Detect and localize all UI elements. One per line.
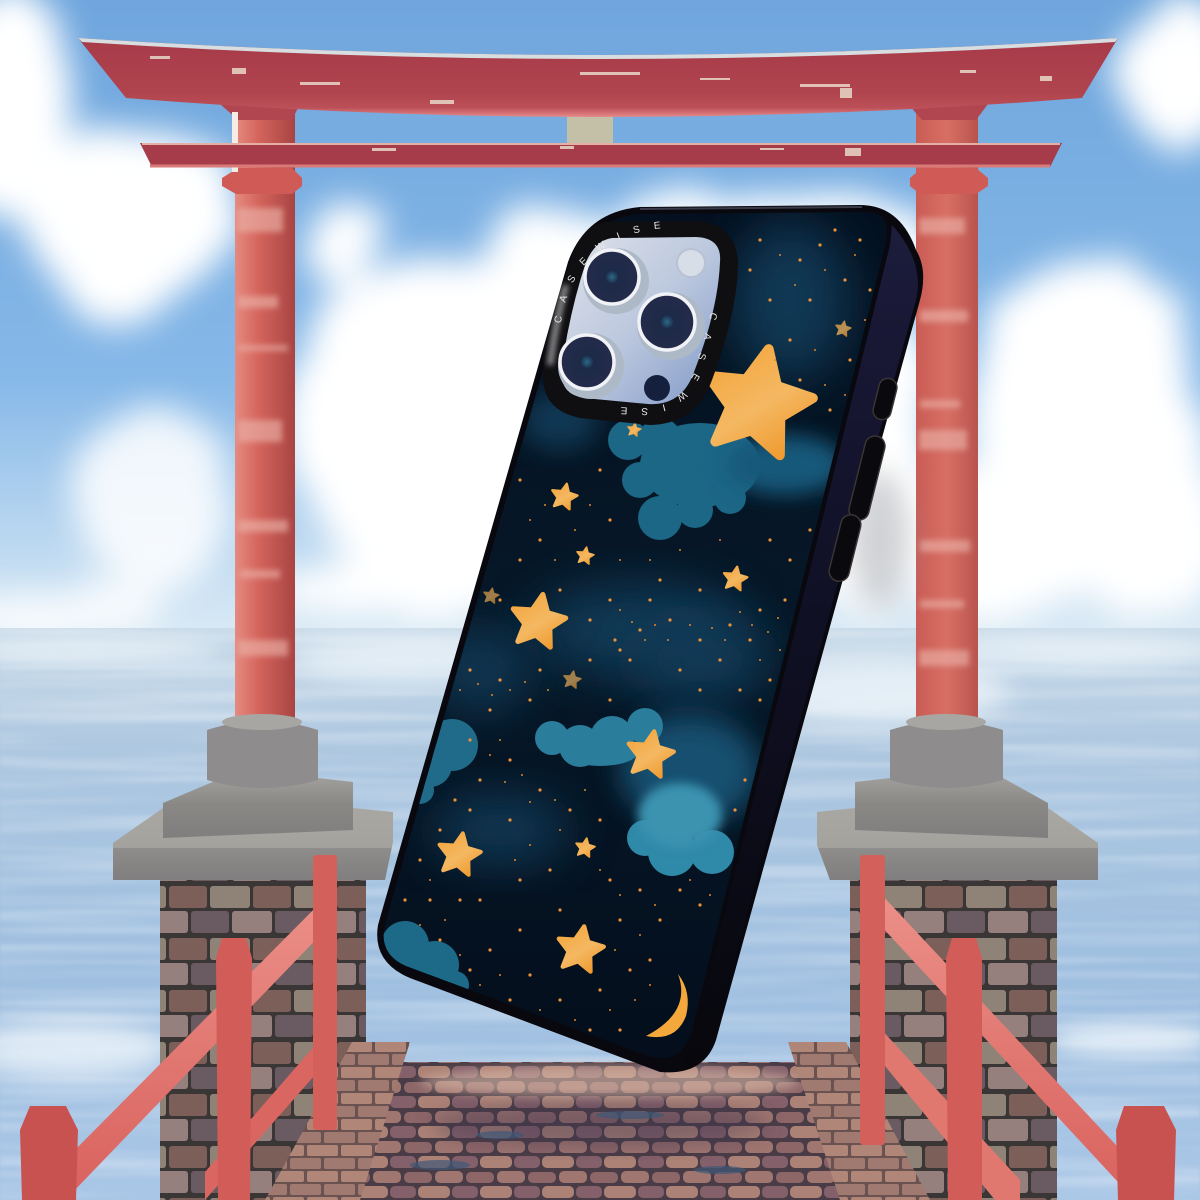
stars <box>435 320 852 973</box>
fine star dust <box>420 255 865 1020</box>
lens bottom <box>558 333 624 399</box>
star dust <box>405 230 870 1030</box>
left stone base <box>113 714 393 1200</box>
stone path <box>265 1042 930 1200</box>
right stone base <box>817 714 1098 1200</box>
sky background <box>0 0 1200 630</box>
torii gate <box>78 38 1118 720</box>
left edge cloud <box>406 719 478 804</box>
brand text ring left and top: CASEWISE <box>554 222 660 322</box>
case outer shell <box>377 205 923 1072</box>
clouds <box>0 0 1200 635</box>
right railing <box>860 855 1176 1200</box>
sea streaks <box>0 628 1200 1200</box>
camera bumper <box>542 221 738 425</box>
lens top <box>583 248 649 314</box>
lower tie beam <box>140 143 1062 167</box>
case side highlight <box>680 225 918 1068</box>
printed back: night sky <box>370 200 900 1070</box>
top beam <box>78 38 1118 117</box>
left railing <box>20 855 337 1200</box>
left curb <box>265 1042 410 1200</box>
case shadow on cloud <box>850 470 910 610</box>
side buttons <box>827 376 899 583</box>
cloud dark upper body <box>620 715 760 825</box>
bumper glare <box>550 285 566 365</box>
mid cloud <box>535 708 760 876</box>
right curb <box>788 1042 930 1200</box>
sea reflections <box>0 636 1200 1080</box>
left pillar <box>216 84 302 720</box>
cloud scalloped edge <box>535 708 663 767</box>
camera plate <box>561 237 720 404</box>
phone case <box>377 205 924 1072</box>
flash <box>677 249 705 277</box>
brand text ring right and bottom: CASEWISE <box>621 313 717 416</box>
right pillar <box>906 84 990 720</box>
soft nebula <box>430 220 850 865</box>
bottom left cloud <box>381 921 469 999</box>
crescent moon <box>646 974 688 1037</box>
lens middle <box>637 292 705 360</box>
sea <box>0 628 1200 1200</box>
centre strut <box>567 104 613 144</box>
cloud bright lower body <box>627 783 734 876</box>
lidar sensor <box>644 375 670 401</box>
rim light on case edge <box>640 207 862 209</box>
upper cloud <box>608 418 845 540</box>
